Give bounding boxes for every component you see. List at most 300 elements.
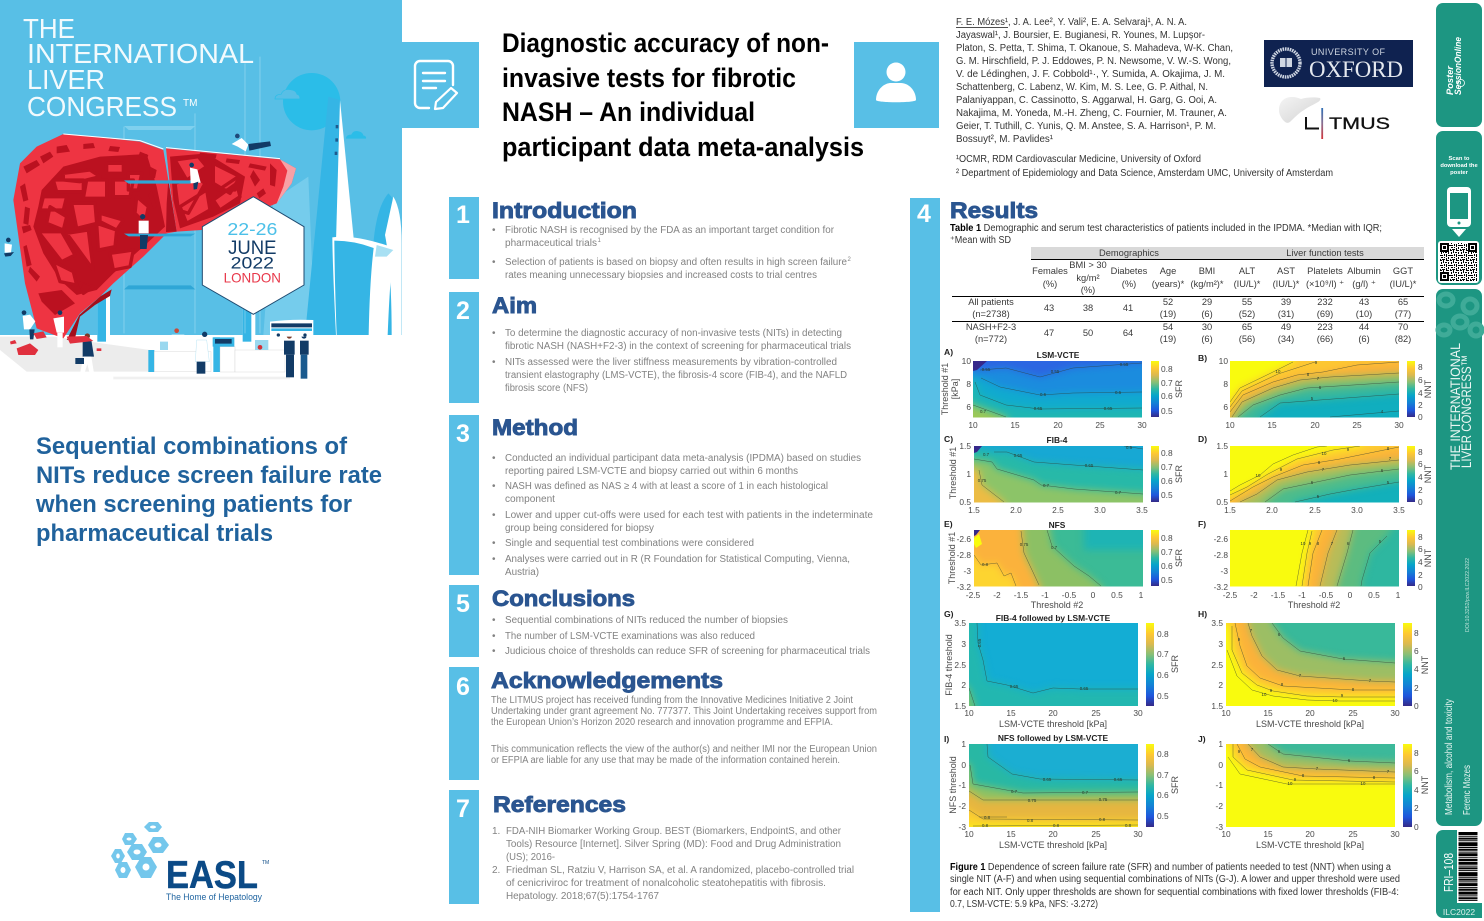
LITMUS logo [1279,97,1390,139]
chart G: FIB-4 followed by LSM-VCTE SFR: G) [944,609,954,619]
chart H: FIB-4 followed by LSM-VCTE NNT: 8 [1414,628,1419,638]
chart H: FIB-4 followed by LSM-VCTE NNT: 15 [1263,708,1273,718]
chart C: FIB-4 SFR: 2.5 [1052,505,1064,515]
chart H: FIB-4 followed by LSM-VCTE NNT: 2 [1218,680,1223,690]
chart I: NFS followed by LSM-VCTE SFR: 0.8 [1099,817,1106,822]
chart G: FIB-4 followed by LSM-VCTE SFR [944,611,1178,729]
chart I: NFS followed by LSM-VCTE SFR: SFR [1170,775,1180,794]
chart D: FIB-4 NNT: NNT [1423,464,1433,483]
chart J: NFS followed by LSM-VCTE NNT: 8 [1373,775,1376,780]
bullets: Lower and upper cut-offs were used for each test with patients in the indeterminate [505,510,873,521]
sidebar: scan to download [1436,131,1482,285]
chart A: LSM-VCTE SFR: 15 [1010,420,1020,430]
chart J: NFS followed by LSM-VCTE NNT: -1 [1216,780,1223,790]
chart J: NFS followed by LSM-VCTE NNT: 7 [1387,769,1390,774]
chart I: NFS followed by LSM-VCTE SFR: -1 [959,780,966,790]
chart D: FIB-4 NNT: 2.0 [1266,505,1278,515]
table 1: All patients [968,297,1014,307]
date hexagon: 2022 [231,254,274,273]
chart E: NFS SFR: -1 [1041,590,1049,600]
chart C: FIB-4 SFR: 0.6 [1161,476,1173,486]
chart D: FIB-4 NNT: 4 [1418,472,1423,482]
chart G: FIB-4 followed by LSM-VCTE SFR: 0.65 [1010,684,1019,689]
table 1: (34) [1278,334,1294,344]
figure caption: 0.7, LSM-VCTE: 5.9 kPa, NFS: -3.272) [950,899,1098,910]
bullets: Selection of patients is based on biopsy and often results in high screen failure [505,257,847,268]
logo hexagons [111,822,169,878]
chart I: NFS followed by LSM-VCTE SFR: 0.6 [1157,790,1169,800]
chart H: FIB-4 followed by LSM-VCTE NNT: 3 [1218,639,1223,649]
chart I: NFS followed by LSM-VCTE SFR: -2 [959,801,966,811]
chart E: NFS SFR: 0.6 [1161,561,1173,571]
bullets [492,615,870,657]
chart E: NFS SFR: 0.7 [1161,547,1173,557]
chart A: LSM-VCTE SFR: 10 [962,356,971,366]
chart I: NFS followed by LSM-VCTE SFR: 0.7 [1157,770,1169,780]
sidebar: poster number: ILC2022 [1443,907,1475,917]
funding text: Undertaking under grant agreement No. 777377. This Joint Undertaking receives support from [491,706,877,717]
chart A: LSM-VCTE SFR: 0.8 [1161,364,1173,374]
authors: Palaniyappan, C. Cassinotto, S. Aggarwal, H. Garg, G. Ooi, A. [956,95,1217,106]
bullets: NITs assessed were the liver stiffness measurements by vibration-controlled [505,357,837,368]
bullets: • [492,631,496,642]
chart I: NFS followed by LSM-VCTE SFR: NFS threshold [948,756,958,814]
reference list: Tools) Resource [Internet]. Silver Spring (MD): Food and Drug Administration [506,839,841,850]
table 1: (56) [1239,334,1255,344]
chart H: FIB-4 followed by LSM-VCTE NNT: 9 [1341,693,1344,698]
DOI: DOI:10.3252/pcw.ILC2022.2022 [1465,558,1471,632]
chart F: NFS NNT: 0 [1418,582,1423,592]
funding text: the European Union’s Horizon 2020 research and innovation programme and EFPIA. [491,717,833,728]
table 1: 38 [1083,303,1093,313]
chart A: LSM-VCTE SFR: 0.65 [1034,406,1043,411]
sidebar: scan to download: poster [1450,170,1469,176]
chart E: NFS SFR: -2.6 [957,534,971,544]
table 1: (6) [1201,309,1213,319]
chart A: LSM-VCTE SFR: 30 [1137,420,1147,430]
chart C: FIB-4 SFR: 0.7 [1115,490,1122,495]
table 1 [952,247,1424,344]
chart E: NFS SFR: 0.75 [1020,542,1029,547]
chart B: LSM-VCTE NNT: 9 [1315,360,1318,365]
table 1: (66) [1317,334,1333,344]
table 1: (10) [1356,309,1372,319]
table 1: 64 [1123,328,1133,338]
chart E: NFS SFR: SFR [1174,548,1184,567]
chart F: NFS NNT: -0.5 [1319,590,1334,600]
lab team [172,328,309,379]
section number box [449,415,479,575]
chart B: LSM-VCTE NNT: 30 [1394,420,1404,430]
EASL logo: EASL [166,854,258,897]
table 1: 50 [1083,328,1093,338]
chart I: NFS followed by LSM-VCTE SFR: -3 [959,822,966,832]
table 1: (%) [1081,285,1095,295]
chart D: FIB-4 NNT: 6 [1381,468,1384,473]
chart F: NFS NNT: -3 [1221,566,1228,576]
chart D: FIB-4 NNT: 8 [1318,460,1321,465]
chart D: FIB-4 NNT: 7 [1389,456,1392,461]
chart J: NFS followed by LSM-VCTE NNT: LSM-VCTE threshold [kPa] [1256,840,1364,850]
chart B: LSM-VCTE NNT: B) [1198,353,1207,363]
chart F: NFS NNT: NNT [1423,548,1433,567]
bullets: reporting paired LSM-VCTE and biopsy carried out within 6 months [505,466,798,477]
chart I: NFS followed by LSM-VCTE SFR: 1 [961,739,966,749]
sidebar: session panel [1436,289,1482,826]
table 1: Liver function tests [1286,248,1364,258]
chart D: FIB-4 NNT: 3.5 [1393,505,1405,515]
chart J: NFS followed by LSM-VCTE NNT: NNT [1420,775,1430,794]
chart J: NFS followed by LSM-VCTE NNT: 9 [1294,777,1297,782]
chart D: FIB-4 NNT: 2 [1418,485,1423,495]
chart B: LSM-VCTE NNT: 8 [1418,362,1423,372]
icon: document header box [402,42,479,128]
chart E: NFS SFR: 1 [1139,590,1144,600]
chart F: NFS NNT: 8 [1317,541,1320,546]
table 1: (82) [1395,334,1411,344]
table 1: 39 [1281,297,1291,307]
chart I: NFS followed by LSM-VCTE SFR: 0.8 [1053,823,1060,828]
chart B: LSM-VCTE NNT: 20 [1310,420,1320,430]
chart J: NFS followed by LSM-VCTE NNT: -3 [1216,822,1223,832]
chart F: NFS NNT: F) [1198,519,1206,529]
chart E: NFS SFR: 0.5 [1111,590,1123,600]
chart J: NFS followed by LSM-VCTE NNT: 6 [1348,758,1351,763]
bus [270,320,313,337]
chart D: FIB-4 NNT: 1.5 [1216,441,1228,451]
chart I: NFS followed by LSM-VCTE SFR: 0 [961,760,966,770]
chart E: NFS SFR: 0.7 [1051,545,1058,550]
reference list: Hepatology. 2018;67(5):1754-1767 [506,891,659,902]
chart F: NFS NNT: -2 [1250,590,1258,600]
chart E: NFS SFR: 0.5 [1161,575,1173,585]
chart B: LSM-VCTE NNT: 10 [1219,356,1228,366]
table 1: BMI > 30 [1069,260,1107,270]
chart E: NFS SFR: 0.8 [1161,533,1173,543]
chart A: LSM-VCTE SFR: 0.7 [1161,378,1173,388]
chart J: NFS followed by LSM-VCTE NNT: 0 [1414,822,1419,832]
bullets: Judicious choice of thresholds can reduce SFR of screening for pharmaceutical trials [505,646,870,657]
figure caption: for each NIT. Only upper thresholds are shown for sequential combinations with fixed lower thresholds (FIB-4: [950,887,1399,898]
table 1: (IU/L)* [1273,279,1300,289]
chart F: NFS NNT: 2 [1418,570,1423,580]
funding text [491,695,877,766]
red rocks [10,331,101,355]
chart A: LSM-VCTE SFR: 25 [1095,420,1105,430]
table 1: 70 [1398,322,1408,332]
heading: Conclusions [492,586,635,611]
chart E: NFS SFR [944,521,1182,608]
chart H: FIB-4 followed by LSM-VCTE NNT: 2.5 [1211,660,1223,670]
table 1: Platelets [1307,266,1343,276]
chart J: NFS followed by LSM-VCTE NNT: 10 [1361,781,1366,786]
chart F: NFS NNT: 8 [1418,532,1423,542]
section number box: 2 [456,297,470,325]
chart E: NFS SFR: 0.8 [982,562,989,567]
heading: Results [950,198,1038,223]
chart A: LSM-VCTE SFR: [kPa] [950,379,960,399]
table 1: (6) [1201,334,1213,344]
chart H: FIB-4 followed by LSM-VCTE NNT: 6 [1278,632,1281,637]
section 2: aim [449,292,851,403]
chart J: NFS followed by LSM-VCTE NNT: 8 [1414,748,1419,758]
sun and clouds [275,73,366,139]
title: Diagnostic accuracy of non- [502,28,829,58]
left headline [35,433,382,547]
table 1: (77) [1395,309,1411,319]
chart J: NFS followed by LSM-VCTE NNT: -2 [1216,801,1223,811]
chart F: NFS NNT: Threshold #2 [1288,600,1340,610]
chart C: FIB-4 SFR [944,436,1182,513]
table 1: Females [1032,266,1068,276]
bullets: 2 [848,257,852,263]
chart G: FIB-4 followed by LSM-VCTE SFR: 0.6 [1157,670,1169,680]
bullets: • [492,554,496,565]
chart H: FIB-4 followed by LSM-VCTE NNT: H) [1198,609,1207,619]
section number box [449,197,479,279]
bullets: • [492,615,496,626]
bullets: • [492,510,496,521]
chart E: NFS SFR: Threshold #1 [947,532,957,584]
chart I: NFS followed by LSM-VCTE SFR: 0.75 [1028,798,1037,803]
chart I: NFS followed by LSM-VCTE SFR: I) [944,734,949,744]
bullets [492,453,873,578]
bullets: fibrotic NASH (NASH+F2-3) in the context of screening for pharmaceutical trials [505,341,851,352]
EASL logo: The Home of Hepatology [166,892,262,902]
section number box: 6 [456,673,470,701]
chart E: NFS SFR: 0 [1091,590,1096,600]
affiliations: ² Department of Epidemiology and Data Science, Amsterdam UMC, University of Amsterdam [956,168,1333,179]
chart I: NFS followed by LSM-VCTE SFR: 30 [1133,829,1143,839]
chart H: FIB-4 followed by LSM-VCTE NNT: 1.5 [1211,701,1223,711]
chart D: FIB-4 NNT: 3.0 [1351,505,1363,515]
chart B: LSM-VCTE NNT: 8 [1223,379,1228,389]
bullets: pharmaceutical trials [505,238,597,249]
chart H: FIB-4 followed by LSM-VCTE NNT: 7 [1299,673,1302,678]
bullets: NASH was defined as NAS ≥ 4 with at least a score of 1 in each histological [505,481,828,492]
barcode [1458,832,1478,901]
sidebar: poster number: FRI–108 [1441,853,1456,892]
table 1: 54 [1163,322,1173,332]
bullets: • [492,257,496,268]
chart G: FIB-4 followed by LSM-VCTE SFR: 0.8 [1157,629,1169,639]
QR code [1438,241,1479,283]
left panel background [0,0,402,336]
chart B: LSM-VCTE NNT: 6 [1319,385,1322,390]
chart D: FIB-4 NNT: 5 [1387,480,1390,485]
sidebar: poster session online: SessionOnline [1453,37,1463,95]
section 6: acknowledgements [449,667,877,780]
chart G: FIB-4 followed by LSM-VCTE SFR: 2.5 [954,660,966,670]
congress name vertical: LIVER CONGRESS™ [1458,355,1474,468]
table 1: (52) [1239,309,1255,319]
table 1: 232 [1317,297,1333,307]
chart I: NFS followed by LSM-VCTE SFR: 15 [1006,829,1016,839]
chart D: FIB-4 NNT: 10 [1322,451,1327,456]
chart H: FIB-4 followed by LSM-VCTE NNT: 10 [1333,698,1338,703]
chart J: NFS followed by LSM-VCTE NNT [1198,736,1428,850]
title [502,28,864,162]
chart C: FIB-4 SFR: 0.75 [978,478,987,483]
chart I: NFS followed by LSM-VCTE SFR: 25 [1091,829,1101,839]
figure caption: Figure 1 Dependence of screen failure rate (SFR) and number of patients needed to test (NNT) when using a [950,862,1391,873]
table 1: 30 [1202,322,1212,332]
table 1: (%) [1043,279,1057,289]
table 1: GGT [1393,266,1413,276]
chart C: FIB-4 SFR: Threshold #1 [948,447,958,499]
chart J: NFS followed by LSM-VCTE NNT: 10 [1221,829,1231,839]
chart E: NFS SFR: NFS [1049,520,1066,530]
chart C: FIB-4 SFR: 1.5 [968,505,980,515]
chart G: FIB-4 followed by LSM-VCTE SFR: 15 [1006,708,1016,718]
chart D: FIB-4 NNT: 2.5 [1309,505,1321,515]
chart A: LSM-VCTE SFR: 0.55 [982,367,991,372]
reference list: of cenicriviroc for treatment of nonalcoholic steatohepatitis with fibrosis. [506,878,826,889]
funding text: or EFPIA are liable for any use that may be made of the information contained herein. [491,755,840,766]
heading: Acknowledgements [491,668,723,693]
chart H: FIB-4 followed by LSM-VCTE NNT: 10 [1221,708,1231,718]
bullets: rates meaning unnecessary biopsies and increased costs to trial centres [505,270,817,281]
chart D: FIB-4 NNT [1198,436,1431,513]
bullets: Austria) [505,567,539,578]
chart J: NFS followed by LSM-VCTE NNT: 7 [1251,747,1254,752]
table 1: 55 [1242,297,1252,307]
chart F: NFS NNT: -2.5 [1223,590,1238,600]
chart H: FIB-4 followed by LSM-VCTE NNT: 7 [1250,628,1253,633]
chart D: FIB-4 NNT: 0 [1418,497,1423,507]
chart B: LSM-VCTE NNT: NNT [1423,379,1433,398]
icon: down arrow [1452,229,1466,237]
chart F: NFS NNT: 10 [1301,541,1306,546]
chart G: FIB-4 followed by LSM-VCTE SFR: LSM-VCTE threshold [kPa] [999,719,1107,729]
authors: Schattenberg, C. Labenz, W. Kim, M. S. Lee, G. P. Aithal, N. [956,82,1208,93]
table 1: (19) [1160,334,1176,344]
chart E: NFS SFR: -3 [964,566,971,576]
table 1: (IU/L)* [1234,279,1261,289]
chart B: LSM-VCTE NNT: 6 [1418,375,1423,385]
chart J: NFS followed by LSM-VCTE NNT: 25 [1348,829,1358,839]
Oxford logo: OXFORD [1309,57,1403,82]
Oxford logo: UNIVERSITY OF [1311,47,1386,57]
chart I: NFS followed by LSM-VCTE SFR: 0.75 [1099,797,1108,802]
figure caption: single NIT (A-F) and when using sequential combinations of NITs (G-J). A lower and upper threshold were used [950,874,1400,885]
chart C: FIB-4 SFR: 0.7 [1043,483,1050,488]
ground [0,335,402,390]
chart G: FIB-4 followed by LSM-VCTE SFR: 1.5 [954,701,966,711]
chart H: FIB-4 followed by LSM-VCTE NNT: 9 [1238,637,1241,642]
authors: F. E. Mózes¹, J. A. Lee², Y. Vali², E. A. Selvaraj¹, A. N. A. [956,17,1187,28]
scientists climbing [4,134,271,377]
chart B: LSM-VCTE NNT: 4 [1381,409,1384,414]
chart J: NFS followed by LSM-VCTE NNT: 30 [1390,829,1400,839]
funding text: The LITMUS project has received funding from the Innovative Medicines Initiative 2 Joint [491,695,853,706]
chart H: FIB-4 followed by LSM-VCTE NNT: LSM-VCTE threshold [kPa] [1256,719,1364,729]
chart C: FIB-4 SFR: FIB-4 [1047,435,1068,445]
chart G: FIB-4 followed by LSM-VCTE SFR: 3.5 [954,618,966,628]
chart I: NFS followed by LSM-VCTE SFR: 0.8 [1027,818,1034,823]
date hexagon: JUNE [228,238,277,259]
chart D: FIB-4 NNT: 7 [1322,467,1325,472]
table 1: 65 [1398,297,1408,307]
chart I: NFS followed by LSM-VCTE SFR [944,735,1178,850]
chart F: NFS NNT: -2.8 [1214,550,1228,560]
section 5: conclusions [449,585,870,657]
chart C: FIB-4 SFR: 3.5 [1136,505,1148,515]
chart B: LSM-VCTE NNT: 25 [1352,420,1362,430]
affiliations [956,154,1333,179]
chart H: FIB-4 followed by LSM-VCTE NNT: 7 [1369,678,1372,683]
chart H: FIB-4 followed by LSM-VCTE NNT: 8 [1281,682,1284,687]
section number box [449,585,479,657]
chart J: NFS followed by LSM-VCTE NNT: 20 [1305,829,1315,839]
sidebar: scan to download: Scan to [1449,156,1470,162]
chart F: NFS NNT: -3.2 [1214,582,1228,592]
chart D: FIB-4 NNT: 1.5 [1224,505,1236,515]
chart E: NFS SFR: Threshold #2 [1031,600,1083,610]
chart I: NFS followed by LSM-VCTE SFR: NFS followed by LSM-VCTE [998,733,1109,743]
lab benches [148,337,285,372]
chart F: NFS NNT: 7 [1331,541,1334,546]
chart F: NFS NNT: 5 [1379,539,1382,544]
authors [956,17,1233,145]
table 1: 52 [1163,297,1173,307]
chart I: NFS followed by LSM-VCTE SFR: 0.65 [1043,777,1052,782]
sidebar: poster session online: Poster [1445,65,1455,95]
chart F: NFS NNT: 6 [1347,541,1350,546]
chart I: NFS followed by LSM-VCTE SFR: 0.65 [1114,777,1123,782]
table 1: 65 [1242,322,1252,332]
chart H: FIB-4 followed by LSM-VCTE NNT: 4 [1414,664,1419,674]
chart B: LSM-VCTE NNT: 5 [1311,396,1314,401]
chart G: FIB-4 followed by LSM-VCTE SFR: FIB-4 threshold [944,634,954,696]
chart I: NFS followed by LSM-VCTE SFR: 10 [964,829,974,839]
chart E: NFS SFR: -2.5 [966,590,981,600]
table 1: (years)* [1152,279,1185,289]
chart C: FIB-4 SFR: 0.6 [1126,445,1133,450]
table 1: 44 [1359,322,1369,332]
chart B: LSM-VCTE NNT: 7 [1317,376,1320,381]
bullets: • [492,646,496,657]
chart H: FIB-4 followed by LSM-VCTE NNT: 25 [1348,708,1358,718]
congress name vertical: THE INTERNATIONAL [1447,343,1463,470]
congress name: INTERNATIONAL [27,38,254,69]
chart C: FIB-4 SFR: 3.0 [1094,505,1106,515]
section 7: references [449,790,854,904]
section 1: introduction [449,197,852,281]
congress name: LIVER [27,64,105,95]
table 1: (n=2738) [972,309,1010,319]
chart G: FIB-4 followed by LSM-VCTE SFR: 2 [961,680,966,690]
Oxford logo [1264,40,1413,87]
chart J: NFS followed by LSM-VCTE NNT: 15 [1263,829,1273,839]
heading: Method [492,415,578,440]
left headline: NITs reduce screen failure rate [36,462,382,489]
chart C: FIB-4 SFR: 0.65 [1085,463,1094,468]
bullets [492,225,852,281]
table 1: (69) [1317,309,1333,319]
chart G: FIB-4 followed by LSM-VCTE SFR: 0.5 [1157,691,1169,701]
section number box: 7 [456,795,470,823]
chart A: LSM-VCTE SFR: 0.5 [1161,406,1173,416]
chart A: LSM-VCTE SFR: LSM-VCTE [1037,350,1080,360]
chart I: NFS followed by LSM-VCTE SFR: 0.8 [1157,749,1169,759]
chart A: LSM-VCTE SFR [942,349,1182,428]
authors: Bossuyt², M. Pavlides¹ [956,134,1054,145]
funding text: This communication reflects the view of the author(s) and neither IMI nor the European Union [491,744,877,755]
chart C: FIB-4 SFR: 0.7 [1161,462,1173,472]
table 1: 43 [1044,303,1054,313]
chart J: NFS followed by LSM-VCTE NNT: 7 [1316,766,1319,771]
